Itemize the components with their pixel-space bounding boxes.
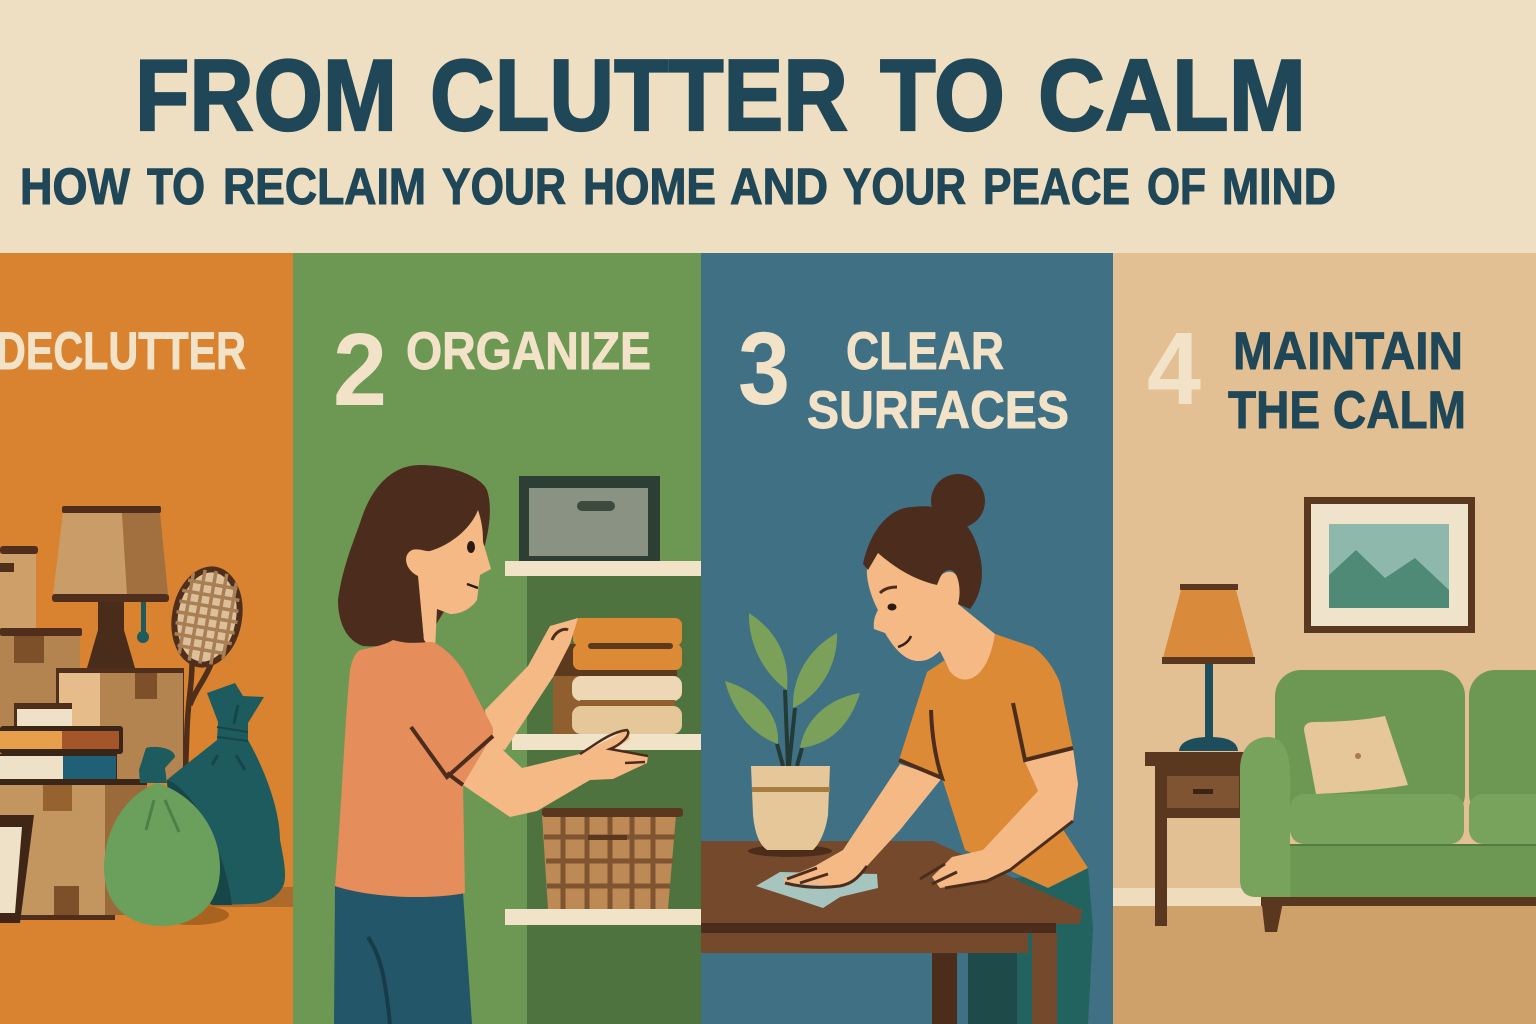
back arm and hand (485, 618, 578, 750)
heading: organize: ORGANIZE (406, 322, 651, 381)
stack of books (0, 703, 147, 785)
cloth (756, 872, 878, 908)
plant pot (748, 766, 832, 857)
shirt (899, 634, 1088, 888)
number 2: 2 (333, 312, 387, 427)
folded towels (553, 618, 682, 734)
heading: maintain the calm: MAINTAIN (1233, 322, 1463, 381)
number 3: 3 (738, 311, 790, 426)
title: TO (880, 40, 1005, 152)
hair (863, 506, 982, 609)
front arm and hand (463, 730, 648, 817)
subtitle: OF (1147, 158, 1206, 215)
side table (1145, 752, 1255, 926)
jeans (334, 886, 472, 1024)
subtitle (20, 158, 1336, 215)
bun (931, 474, 985, 528)
cushion (1304, 716, 1408, 794)
heading: maintain the calm (1228, 322, 1466, 440)
face (867, 548, 995, 689)
subtitle: TO (147, 158, 205, 215)
hair (338, 465, 490, 646)
figure: arms and hands (783, 703, 1078, 888)
subtitle: YOUR (843, 158, 966, 215)
title: FROM (135, 40, 397, 152)
subtitle: AND (730, 158, 828, 215)
heading: clear surfaces: SURFACES (807, 381, 1069, 440)
panel: maintain the calm (1113, 253, 1536, 1024)
panel: clear surfaces (701, 253, 1113, 1024)
clutter pile: boxes (0, 546, 184, 920)
sofa (1240, 670, 1536, 932)
icon: table lamp (52, 506, 169, 668)
figure: woman wiping table, body (863, 474, 1093, 1024)
heading: maintain the calm: THE CALM (1228, 381, 1466, 440)
icon: storage box (519, 476, 660, 561)
title: CALM (1038, 40, 1306, 152)
icon: wicker basket (542, 808, 683, 909)
floor (1113, 888, 1536, 906)
title (135, 40, 1306, 152)
heading: declutter: DECLUTTER (0, 322, 246, 381)
floor band (200, 887, 293, 907)
shirt (335, 640, 493, 897)
neck (418, 570, 435, 650)
icon: green trash bag (104, 747, 229, 926)
panel: organize (293, 253, 701, 1024)
figure: woman organizing (334, 465, 648, 1024)
face (406, 510, 491, 650)
icon: dark trash bag (167, 683, 285, 905)
subtitle: MIND (1222, 158, 1336, 215)
heading: clear surfaces (807, 322, 1069, 440)
table (701, 841, 1082, 1024)
header band (0, 0, 1536, 253)
jeans (968, 868, 1093, 1024)
number 4: 4 (1147, 311, 1201, 426)
icon: potted plant (725, 613, 860, 766)
subtitle: RECLAIM (223, 158, 426, 215)
icon: tennis racket (167, 564, 247, 785)
heading: clear surfaces: CLEAR (846, 322, 1004, 381)
subtitle: YOUR (442, 158, 566, 215)
subtitle: PEACE (983, 158, 1130, 215)
shelving unit (505, 561, 701, 1024)
picture frame on floor (0, 815, 34, 923)
title: CLUTTER (430, 40, 848, 152)
framed picture (1304, 497, 1475, 633)
subtitle: HOW (20, 158, 131, 215)
icon: table lamp (1162, 584, 1255, 751)
subtitle: HOME (583, 158, 716, 215)
panel: declutter (0, 253, 293, 1024)
